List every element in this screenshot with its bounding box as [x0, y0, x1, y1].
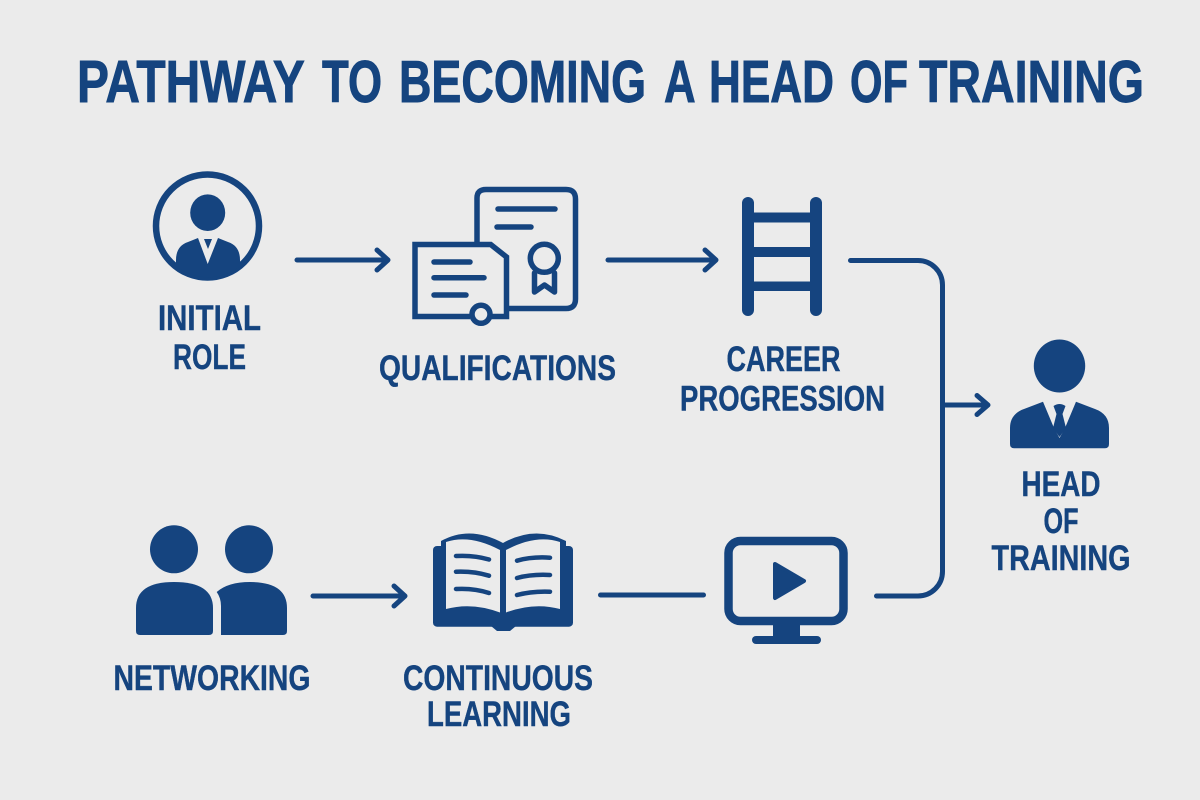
icon: two people: [136, 525, 287, 635]
label: career progression: CAREER: [726, 340, 840, 379]
icon: video monitor: [728, 541, 844, 644]
title: TO: [322, 49, 382, 115]
connector: bottom branch to merge: [876, 405, 942, 596]
icon: certificates: [415, 190, 576, 323]
label: head of training: TRAINING: [992, 539, 1130, 578]
label: continuous learning: LEARNING: [427, 695, 571, 734]
connector: top branch to merge: [850, 260, 942, 405]
title: PATHWAY: [77, 49, 305, 115]
label: career progression: PROGRESSION: [680, 380, 885, 419]
label: initial role: ROLE: [173, 338, 246, 377]
label: qualifications: QUALIFICATIONS: [379, 349, 616, 388]
step: career progression: [680, 197, 885, 419]
title: TRAINING: [919, 49, 1144, 115]
icon: person in circle: [156, 174, 259, 278]
step: initial role: [156, 174, 261, 377]
step: qualifications: [379, 190, 616, 388]
icon: ladder: [742, 197, 822, 316]
step: continuous learning: [403, 533, 593, 734]
arrow: networking to continuous learning: [313, 586, 405, 606]
title: HEAD: [709, 49, 834, 115]
label: continuous learning: CONTINUOUS: [403, 659, 593, 698]
label: networking: NETWORKING: [114, 659, 310, 698]
title: BECOMING: [399, 49, 646, 115]
arrow: merge to head of training: [944, 396, 988, 414]
connector: continuous learning to video: [600, 592, 704, 598]
title: A: [664, 49, 695, 115]
label: head of training: HEAD: [1022, 465, 1100, 504]
label: initial role: INITIAL: [158, 299, 261, 338]
step: head of training: [992, 340, 1130, 578]
icon: person with tie: [1010, 340, 1109, 448]
step: networking: [114, 525, 310, 698]
title: OF: [850, 49, 908, 115]
arrow: initial role to qualifications: [297, 250, 388, 270]
arrow: qualifications to career progression: [608, 250, 716, 270]
icon: open book: [433, 533, 573, 631]
label: head of training: OF: [1044, 502, 1078, 541]
